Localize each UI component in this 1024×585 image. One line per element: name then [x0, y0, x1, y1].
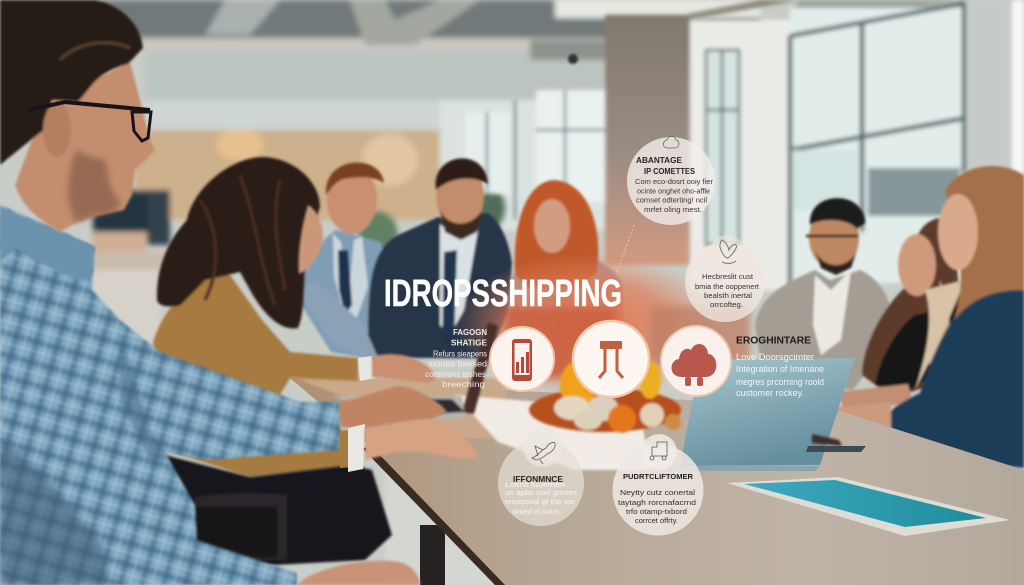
bubble: information: Loeist fuuemen — [505, 482, 565, 489]
bubble: product customer: PUDRTCLIFTOMER — [623, 472, 694, 481]
icon: leaf — [720, 240, 736, 263]
left laptop — [332, 322, 498, 422]
colleague: woman with dark hair — [838, 218, 963, 408]
central orange glow — [455, 253, 750, 397]
colleague: red-haired woman — [510, 180, 623, 320]
dark trousers and chair — [165, 455, 392, 565]
bubble: shopping — [685, 235, 765, 322]
ceiling camera — [568, 54, 578, 64]
table — [290, 378, 1024, 585]
bubble: product customer: taytagh rorcnafacrnd — [618, 498, 696, 507]
bubble: advantage: mrfet oling mest. — [644, 207, 702, 214]
icon circle: cloud — [661, 326, 731, 396]
bubble: product customer: Neytty cutz conertal — [620, 488, 695, 497]
text block: right integration: EROGHINTARE — [736, 336, 811, 346]
bubble: information: enuxtonul gf the toe — [505, 499, 575, 506]
fruit platter — [529, 361, 681, 433]
foreground man in plaid shirt — [0, 0, 478, 585]
icon circle: stool — [573, 321, 649, 397]
bubble: product customer — [612, 434, 704, 536]
bubble: information: IFFONMNCE — [513, 475, 564, 484]
text block: left strategy — [425, 328, 488, 389]
bubble: shopping: bmia the ooppenert — [695, 284, 759, 291]
icon: small cloud — [663, 136, 679, 148]
bubble: information: omed ol noon. — [513, 509, 561, 516]
colleague: man in blue suit — [296, 162, 406, 364]
bubble: advantage: Com eco-dosrt ooiy fier — [635, 179, 714, 186]
glasses — [28, 102, 151, 141]
text block: right integration: megres prcorning roold — [736, 377, 824, 388]
text block: left strategy: FAGOGN — [453, 328, 487, 337]
bubble: information: un aplar ooiil grimes — [505, 490, 578, 497]
text block: right integration: Love Doorsgcimter — [736, 352, 814, 363]
text block: right integration — [736, 336, 824, 399]
background colleagues — [296, 158, 623, 364]
bubble: shopping: Hecbreslit cust — [702, 274, 753, 281]
title: IDROPSSHIPPING — [384, 273, 622, 315]
colleague: man in navy suit — [368, 158, 512, 358]
curly hair — [157, 157, 320, 329]
tablet — [727, 477, 1010, 536]
colleague: bearded man — [755, 198, 893, 390]
bubble: product customer: trfo otamp-txbord — [626, 507, 687, 516]
text block: right integration: customer rockey. — [736, 388, 804, 399]
bubble: shopping: orrcofteg. — [710, 302, 743, 309]
text block: left strategy: Refurs sieapens — [433, 350, 487, 358]
dashed connector — [616, 225, 634, 275]
hand on keyboard of second man — [358, 356, 375, 381]
text block: left strategy: moutte baesed — [428, 360, 487, 368]
icon circle: mobile analytics — [490, 327, 554, 391]
sweater — [153, 272, 358, 477]
bubble: advantage — [627, 136, 715, 225]
text block: left strategy: breeching — [442, 380, 485, 389]
bubble: shopping: bealsth inertal — [704, 293, 752, 300]
bubble: advantage: ocinte onghet oho-affle — [637, 188, 710, 196]
right laptop — [665, 358, 866, 471]
icon: bird — [532, 442, 555, 464]
collar — [0, 207, 95, 282]
bubble: product customer: corrcet offrty. — [635, 516, 678, 525]
hands — [340, 386, 447, 429]
bubble: advantage: comset odterting! ncil — [636, 198, 707, 204]
right colleagues — [755, 166, 1024, 468]
bubble: information — [498, 427, 584, 526]
head — [0, 0, 155, 232]
text block: left strategy: SHATIGE — [451, 338, 488, 348]
text block: right integration: Integration of Imenane — [736, 364, 824, 375]
text block: left strategy: commens lpshes — [425, 370, 486, 379]
shirt shading — [0, 440, 110, 585]
seated woman with curly hair — [153, 157, 436, 565]
colleague: woman with auburn hair — [826, 166, 1024, 468]
bubble: advantage: IP COMETTES — [644, 167, 696, 176]
icon: box — [650, 442, 667, 460]
bubble: advantage: ABANTAGE — [636, 156, 683, 165]
